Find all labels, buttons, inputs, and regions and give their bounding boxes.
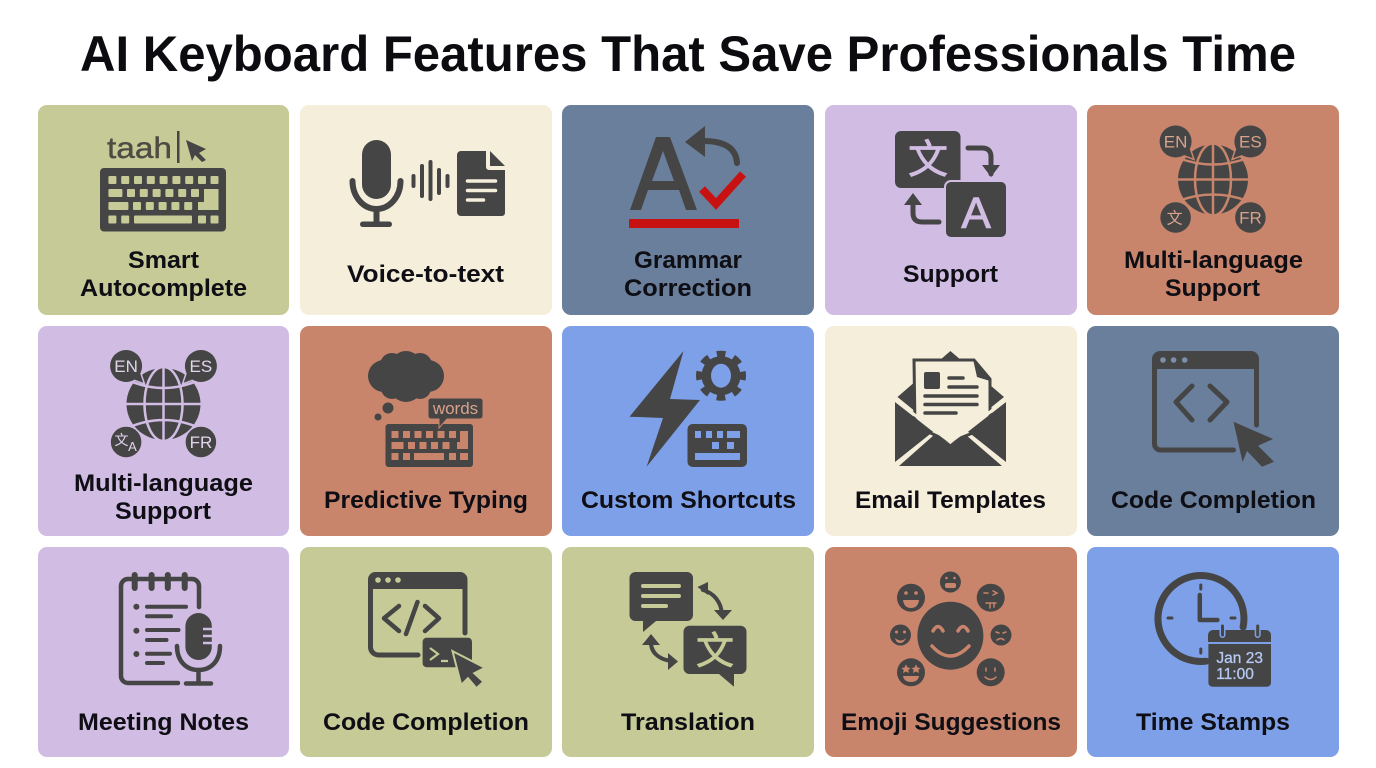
label line 2: Support	[115, 498, 211, 525]
label: Emoji Suggestions	[841, 709, 1061, 736]
icon: translation boxes with arrows	[895, 131, 1007, 238]
panel: Translation	[562, 547, 814, 757]
label line 2: Support	[1165, 275, 1260, 302]
icon: translation boxes with arrows: 文	[908, 138, 948, 182]
panel: Code Completion (green)	[300, 547, 552, 757]
icon: globe with language bubbles: EN	[1164, 132, 1187, 152]
card background	[1087, 326, 1339, 536]
panel: Smart Autocomplete	[38, 105, 289, 315]
card background	[38, 547, 289, 757]
card background	[562, 105, 814, 315]
label: Voice-to-text	[347, 261, 504, 288]
icon: globe with language bubbles: FR	[190, 433, 212, 452]
label: Meeting Notes	[78, 709, 249, 736]
card background	[38, 326, 289, 536]
icon: globe with language bubbles	[110, 350, 217, 458]
panel: Voice-to-text	[300, 105, 552, 315]
card background	[825, 105, 1077, 315]
icon: keyboard with typed text and cursor	[100, 131, 226, 232]
panel: Multi-language Support (terracotta)	[1087, 105, 1339, 315]
icon: code window, terminal and cursor	[368, 572, 483, 687]
label: Code Completion	[323, 709, 529, 736]
card background	[1087, 105, 1339, 315]
card background	[825, 326, 1077, 536]
label line 2: Autocomplete	[80, 275, 247, 302]
panel: Grammar Correction	[562, 105, 814, 315]
panel: Predictive Typing	[300, 326, 552, 536]
card background	[562, 547, 814, 757]
icon: microphone, sound wave and document	[352, 140, 505, 227]
icon: globe with language bubbles: A	[128, 439, 137, 454]
icon: thought cloud, word bubble and keyboard	[368, 351, 483, 467]
icon: globe with language bubbles: EN	[114, 357, 138, 376]
label: Email Templates	[855, 487, 1046, 514]
icon: clock and calendar: 11:00	[1216, 666, 1254, 683]
label: Translation	[621, 709, 755, 736]
icon: globe with language bubbles: ES	[1239, 132, 1262, 152]
icon: code window with cursor	[1152, 351, 1274, 467]
label line 2: Correction	[624, 275, 752, 302]
panel: Emoji Suggestions	[825, 547, 1077, 757]
card background	[38, 105, 289, 315]
panel: Email Templates	[825, 326, 1077, 536]
label: Time Stamps	[1136, 709, 1290, 736]
title: AI Keyboard Features That Save Professionals Time	[80, 26, 1296, 82]
icon: lightning bolt, gear and keyboard	[630, 351, 747, 467]
card background	[300, 105, 552, 315]
label: Code Completion	[1111, 487, 1316, 514]
icon: globe with language bubbles: FR	[1239, 208, 1262, 228]
icon: notepad with microphone	[121, 575, 220, 684]
icon: translation boxes with arrows: A	[961, 189, 991, 238]
panel: Code Completion (slate)	[1087, 326, 1339, 536]
icon: letter A with undo arrow and red check	[629, 126, 743, 228]
icon: globe with language bubbles	[1160, 126, 1266, 234]
icon: clock and calendar	[1158, 575, 1271, 687]
panel: Custom Shortcuts	[562, 326, 814, 536]
icon: globe with language bubbles: 文	[114, 432, 128, 448]
card background	[562, 326, 814, 536]
panel: Multi-language Support (lavender)	[38, 326, 289, 536]
panel: Support	[825, 105, 1077, 315]
label: Smart	[128, 247, 199, 274]
icon: globe with language bubbles: ES	[190, 357, 212, 376]
label: Predictive Typing	[324, 487, 528, 514]
icon: clock and calendar: Jan 23	[1216, 650, 1263, 667]
label: Multi-language	[1124, 247, 1303, 274]
icon: speech bubbles with arrows	[630, 572, 746, 687]
icon: thought cloud, word bubble and keyboard: words	[432, 399, 478, 418]
icon: keyboard with typed text and cursor: taah	[107, 132, 172, 165]
icon: speech bubbles with arrows: 文	[696, 631, 734, 673]
label: Grammar	[634, 247, 742, 274]
icon: ring of smiley faces	[890, 572, 1012, 686]
icon: globe with language bubbles: 文	[1167, 210, 1183, 228]
panel: Meeting Notes	[38, 547, 289, 757]
card background	[825, 547, 1077, 757]
card background	[300, 547, 552, 757]
label: Multi-language	[74, 470, 253, 497]
label: Support	[903, 261, 998, 288]
icon: open envelope with document	[895, 351, 1006, 466]
panel: Time Stamps	[1087, 547, 1339, 757]
card background	[1087, 547, 1339, 757]
card background	[300, 326, 552, 536]
label: Custom Shortcuts	[581, 487, 796, 514]
